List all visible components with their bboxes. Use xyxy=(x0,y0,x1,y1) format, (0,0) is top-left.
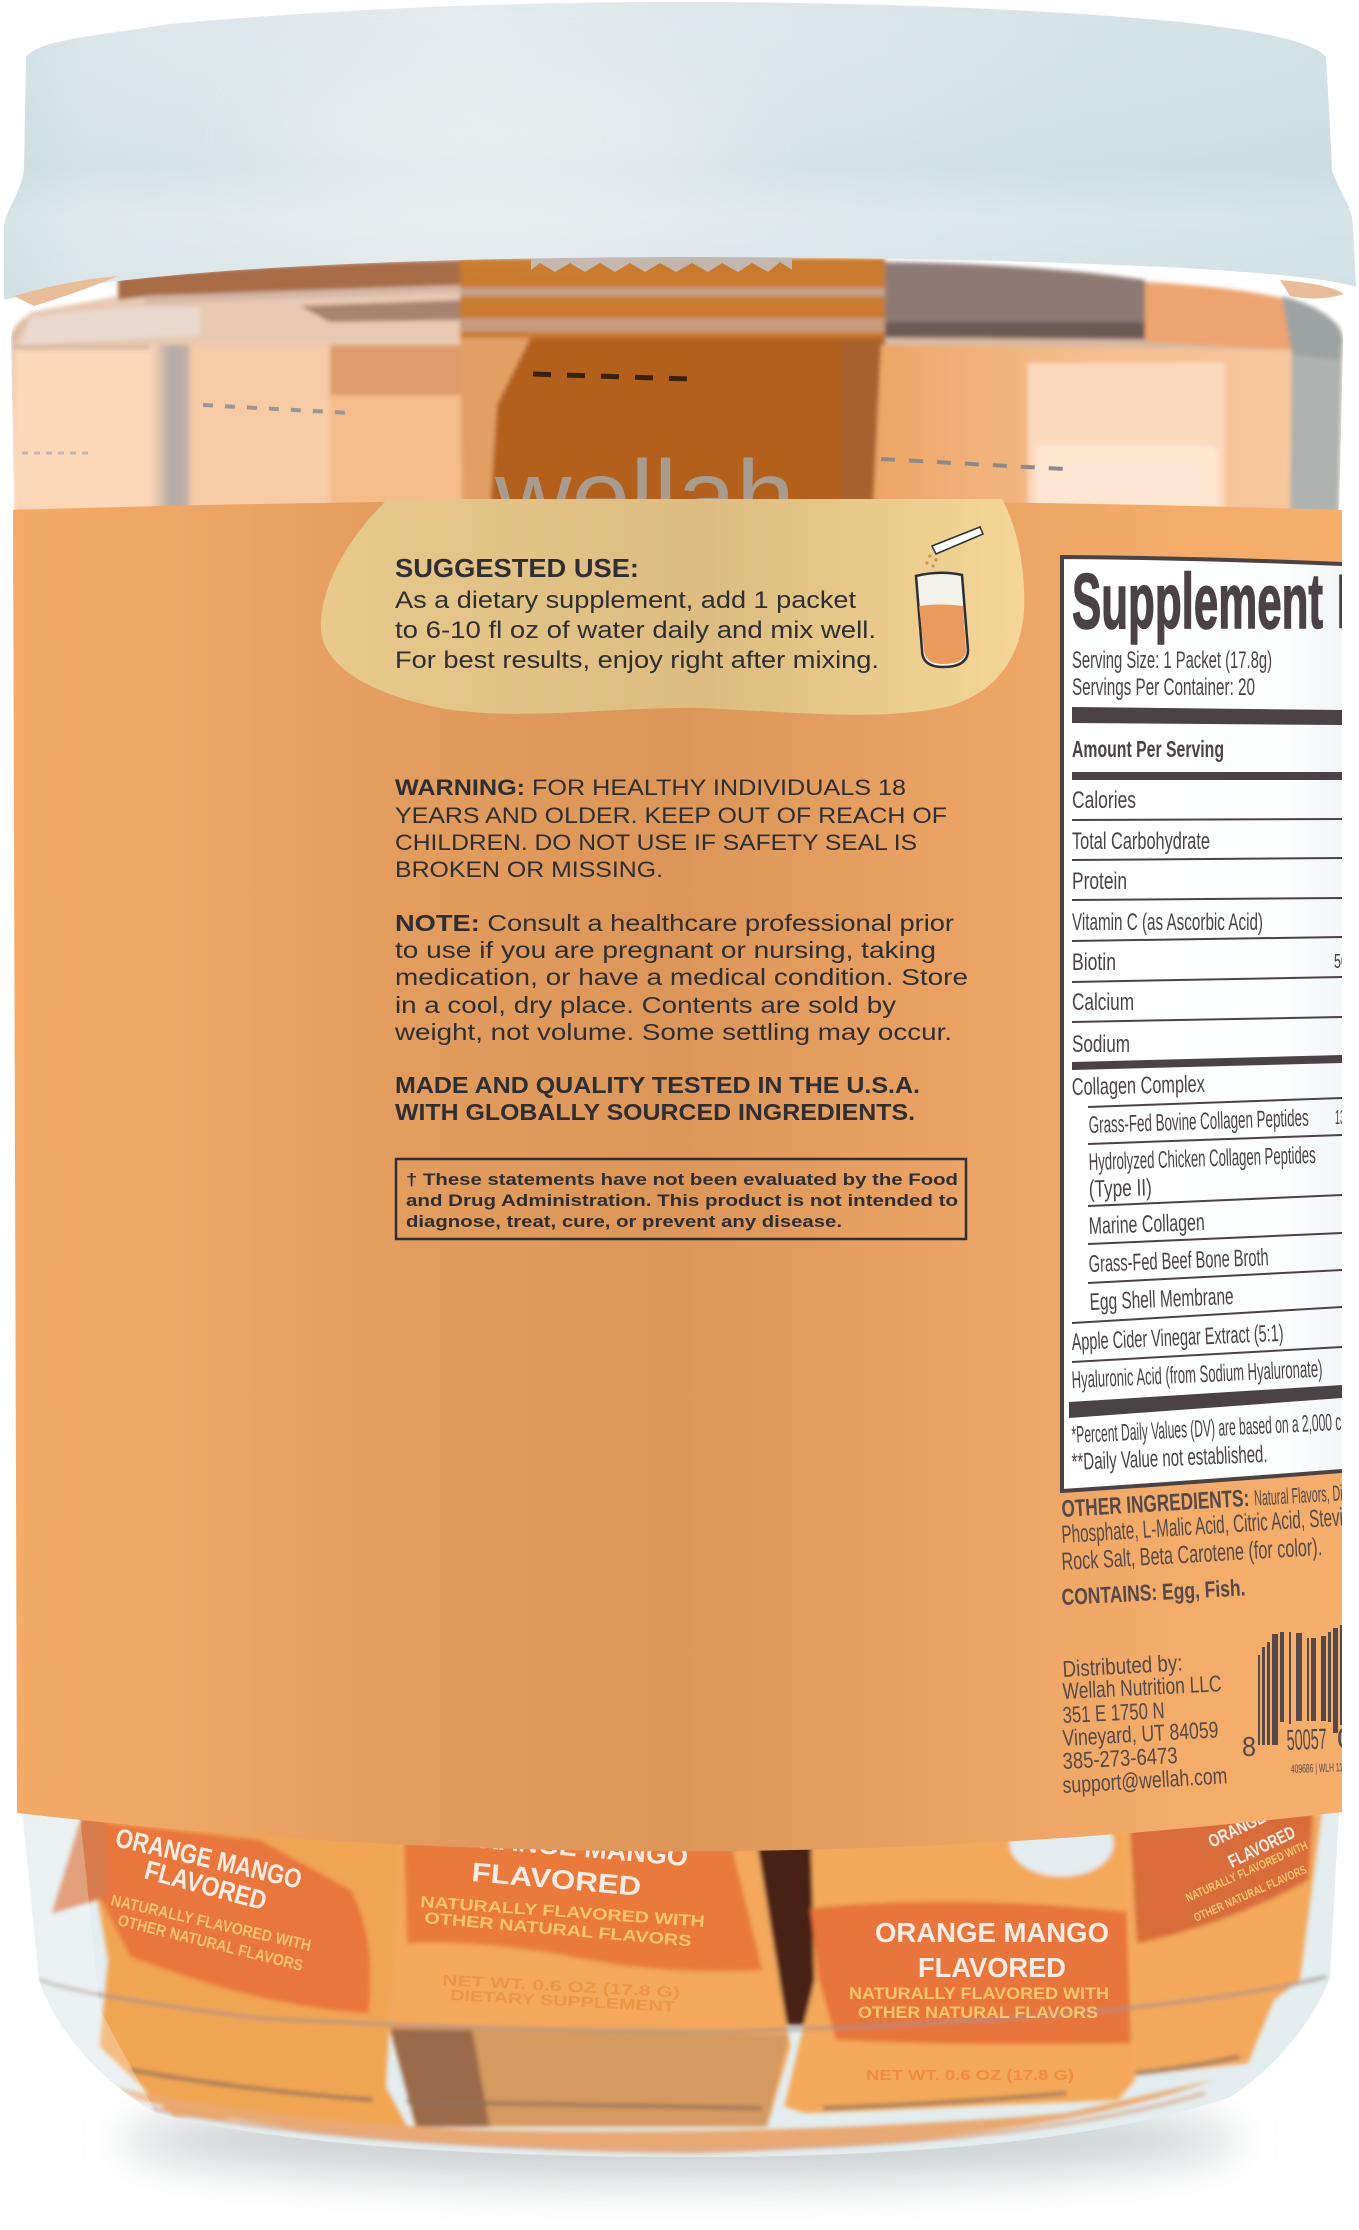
packet text: far right packet: FLAVORED xyxy=(1225,1822,1298,1872)
base rings: shadow strokes xyxy=(130,2057,1239,2108)
packet text: far right packet: OTHER NATURAL FLAVORS xyxy=(1192,1862,1309,1925)
packet text: left packet: NATURALLY FLAVORED WITH xyxy=(109,1892,313,1955)
neck centre orange xyxy=(460,258,885,338)
packet: folded peach xyxy=(329,394,464,503)
dark packet side shade xyxy=(842,338,882,499)
other ingredients: CONTAINS: Egg, Fish. xyxy=(1061,1574,1246,1610)
gray gap strip xyxy=(150,344,190,506)
other ingredients xyxy=(1061,1480,1347,1610)
thick divider collagen xyxy=(1072,1055,1342,1070)
warning text: BROKEN OR MISSING. xyxy=(395,857,663,882)
pale packet inner box xyxy=(1036,445,1218,510)
note text: weight, not volume. Some settling may occur. xyxy=(394,1019,952,1045)
dashed fold: right xyxy=(881,459,1064,469)
note text: NOTE: Consult a healthcare professional prior xyxy=(395,910,954,936)
barcode xyxy=(1242,1625,1353,1776)
warning text: YEARS AND OLDER. KEEP OUT OF REACH OF xyxy=(395,803,947,828)
FDA disclaimer box: diagnose, treat, cure, or prevent any disease. xyxy=(406,1212,842,1231)
packet logo peeking above label: wellah xyxy=(494,440,795,552)
packet 3 round badge xyxy=(1010,1810,1114,1877)
icon: packet poured into glass xyxy=(916,527,983,667)
packet text: middle packet: OTHER NATURAL FLAVORS xyxy=(424,1910,693,1950)
barcode digits: 0 xyxy=(1337,1723,1353,1755)
jar lid xyxy=(4,2,1356,306)
distributor address: 385-273-6473 xyxy=(1062,1742,1178,1774)
daily value footnotes xyxy=(1071,1409,1342,1476)
packet text: right packet: NATURALLY FLAVORED WITH xyxy=(849,1984,1109,2003)
neck left second brown xyxy=(300,300,460,322)
neck left pale ring xyxy=(145,285,460,304)
barcode digits: 8 xyxy=(1242,1731,1256,1762)
amount per serving: Amount Per Serving xyxy=(1072,736,1224,762)
suggested use text xyxy=(395,553,879,674)
suggested use text: As a dietary supplement, add 1 packet xyxy=(395,587,856,614)
neck far-right gray xyxy=(1282,296,1343,360)
white mask right of jar xyxy=(1343,345,1359,1825)
packet text: far right packet: NATURALLY FLAVORED WITH xyxy=(1184,1838,1310,1905)
distributor address: 351 E 1750 N xyxy=(1062,1697,1165,1728)
gap dark xyxy=(752,1813,819,2025)
note text: medication, or have a medical condition. Store xyxy=(395,964,968,990)
packet text: right packet xyxy=(849,1917,1109,2084)
suggested use text: SUGGESTED USE: xyxy=(395,553,639,583)
FDA disclaimer box: † These statements have not been evaluated by the Food xyxy=(406,1170,958,1189)
nutrient rows: Biotin xyxy=(1072,949,1116,976)
neck right peach xyxy=(1145,282,1292,350)
FDA disclaimer box xyxy=(396,1159,966,1239)
serving info: Servings Per Container: 20 xyxy=(1072,674,1255,701)
suggested use text: to 6-10 fl oz of water daily and mix well. xyxy=(395,617,876,644)
packet 2 band xyxy=(403,1813,763,1971)
distributor address: Wellah Nutrition LLC xyxy=(1062,1670,1222,1704)
note text: to use if you are pregnant or nursing, taking xyxy=(395,937,936,963)
ledge ring xyxy=(39,1977,1326,2032)
collagen complex rows: Collagen Complex xyxy=(1071,1071,1205,1101)
packet flap xyxy=(460,338,532,510)
collagen complex rows xyxy=(1071,1071,1345,1394)
neck right brown xyxy=(885,262,1145,340)
packet 3 body xyxy=(784,1813,1135,2113)
packet text: far right packet: ORANGE MANGO xyxy=(1205,1782,1320,1852)
dashed fold: gray left xyxy=(203,405,350,413)
packet: pale left xyxy=(12,348,152,510)
made in USA statement: MADE AND QUALITY TESTED IN THE U.S.A. xyxy=(395,1072,920,1098)
nutrient rows xyxy=(1072,787,1348,1058)
packet text: middle packet: NATURALLY FLAVORED WITH xyxy=(420,1894,705,1931)
packet 4 band xyxy=(1129,1813,1313,1943)
other ingredients: OTHER INGREDIENTS: xyxy=(1061,1485,1250,1523)
packet 1 body xyxy=(82,1813,407,2127)
neck right dark band xyxy=(885,322,1145,338)
packet text: right packet: OTHER NATURAL FLAVORS xyxy=(858,2003,1098,2022)
packet text: right packet: ORANGE MANGO xyxy=(875,1917,1109,1948)
packet text: middle packet: DIETARY SUPPLEMENT xyxy=(450,1987,675,2016)
packet 2 lower tan xyxy=(390,2028,789,2127)
thick bottom divider xyxy=(1069,1385,1342,1418)
dashed fold: far left xyxy=(22,452,94,454)
packet: right peach xyxy=(873,345,1295,510)
glass sheen over base xyxy=(20,1815,156,2113)
warning text: CHILDREN. DO NOT USE IF SAFETY SEAL IS xyxy=(395,830,917,855)
packet text: middle packet: ORANGE MANGO xyxy=(457,1822,689,1872)
nutrient rows: 50 xyxy=(1334,951,1348,973)
lid rim crescent left xyxy=(14,276,118,306)
packet text: middle packet: NET WT. 0.6 OZ (17.8 G) xyxy=(442,1972,680,2001)
packet photo shapes xyxy=(39,1810,1326,2153)
note text: in a cool, dry place. Contents are sold by xyxy=(395,992,897,1018)
lid rim crescent right xyxy=(1280,280,1344,299)
collagen complex rows: Egg Shell Membrane xyxy=(1089,1283,1234,1316)
thick divider xyxy=(1072,707,1342,725)
packet text: right packet: NET WT. 0.6 OZ (17.8 G) xyxy=(866,2067,1074,2084)
suggested use blob xyxy=(321,499,1024,715)
collagen complex rows: (Type II) xyxy=(1088,1174,1152,1203)
packet text: right packet: FLAVORED xyxy=(918,1952,1066,1983)
distributor address: support@wellah.com xyxy=(1062,1762,1228,1798)
nutrient rows: Total Carbohydrate xyxy=(1072,828,1210,855)
note text xyxy=(394,910,968,1045)
collagen complex rows: Marine Collagen xyxy=(1088,1209,1205,1240)
suggested use text: For best results, enjoy right after mixing. xyxy=(395,647,879,674)
medium divider xyxy=(1072,772,1342,780)
packet text: left packet: OTHER NATURAL FLAVORS xyxy=(116,1912,305,1975)
barcode digits xyxy=(1242,1723,1353,1776)
neck centre pale band xyxy=(460,288,885,296)
packet seal strip xyxy=(330,340,462,395)
warning text xyxy=(395,775,947,882)
dashed fold: dark xyxy=(533,374,690,379)
packet: dark orange centre xyxy=(490,335,885,510)
neck centre lower band xyxy=(460,318,885,332)
FDA disclaimer box: and Drug Administration. This product is not intended to xyxy=(406,1191,958,1210)
nutrient rows: Calcium xyxy=(1072,989,1134,1016)
jar upper body with packets xyxy=(11,257,1344,510)
neck left brown xyxy=(118,260,460,300)
serving info xyxy=(1072,647,1272,701)
packet 4 body xyxy=(1127,1813,1322,2075)
made in USA statement: WITH GLOBALLY SOURCED INGREDIENTS. xyxy=(395,1099,915,1125)
made in USA statement xyxy=(395,1072,920,1125)
bottom amber xyxy=(113,2080,1213,2153)
jar base with packets xyxy=(0,1782,1359,2170)
packet text: left packet xyxy=(109,1823,313,1975)
packet: peach xyxy=(190,345,330,510)
distributor address xyxy=(1062,1649,1228,1798)
serrated packet tips xyxy=(531,257,792,272)
nutrient rows: Protein xyxy=(1072,868,1127,895)
distributor address: Distributed by: xyxy=(1062,1649,1183,1682)
packet 1 band xyxy=(82,1820,370,2013)
ground shadow xyxy=(120,2098,1240,2182)
packet text: far right packet xyxy=(1184,1782,1320,1925)
distributor address: Vineyard, UT 84059 xyxy=(1062,1716,1219,1751)
packet 3 band xyxy=(810,1902,1131,2044)
supplement facts panel xyxy=(1062,557,1359,1491)
packet text: left packet: FLAVORED xyxy=(141,1855,270,1916)
left sliver packet xyxy=(52,1813,108,1913)
gray right strip xyxy=(1288,352,1342,510)
nutrient rows: Calories xyxy=(1072,787,1136,814)
neck left band xyxy=(14,258,460,345)
supplement facts panel: 13 xyxy=(1335,1107,1345,1129)
packet text: middle packet xyxy=(420,1822,705,2016)
neck left pale xyxy=(20,307,200,345)
pale packet box xyxy=(1028,363,1225,510)
packet 2 body xyxy=(390,1813,790,2127)
label wrap xyxy=(13,499,1342,1851)
nutrient rows: Sodium xyxy=(1072,1031,1130,1058)
bottom ring xyxy=(152,2093,1205,2150)
packet text: middle packet: FLAVORED xyxy=(470,1857,642,1902)
warning text: WARNING: FOR HEALTHY INDIVIDUALS 18 xyxy=(395,775,906,800)
packet 2 dark corner xyxy=(390,2028,490,2127)
packet text: left packet: ORANGE MANGO xyxy=(113,1823,305,1895)
lid soft highlight xyxy=(260,85,740,195)
